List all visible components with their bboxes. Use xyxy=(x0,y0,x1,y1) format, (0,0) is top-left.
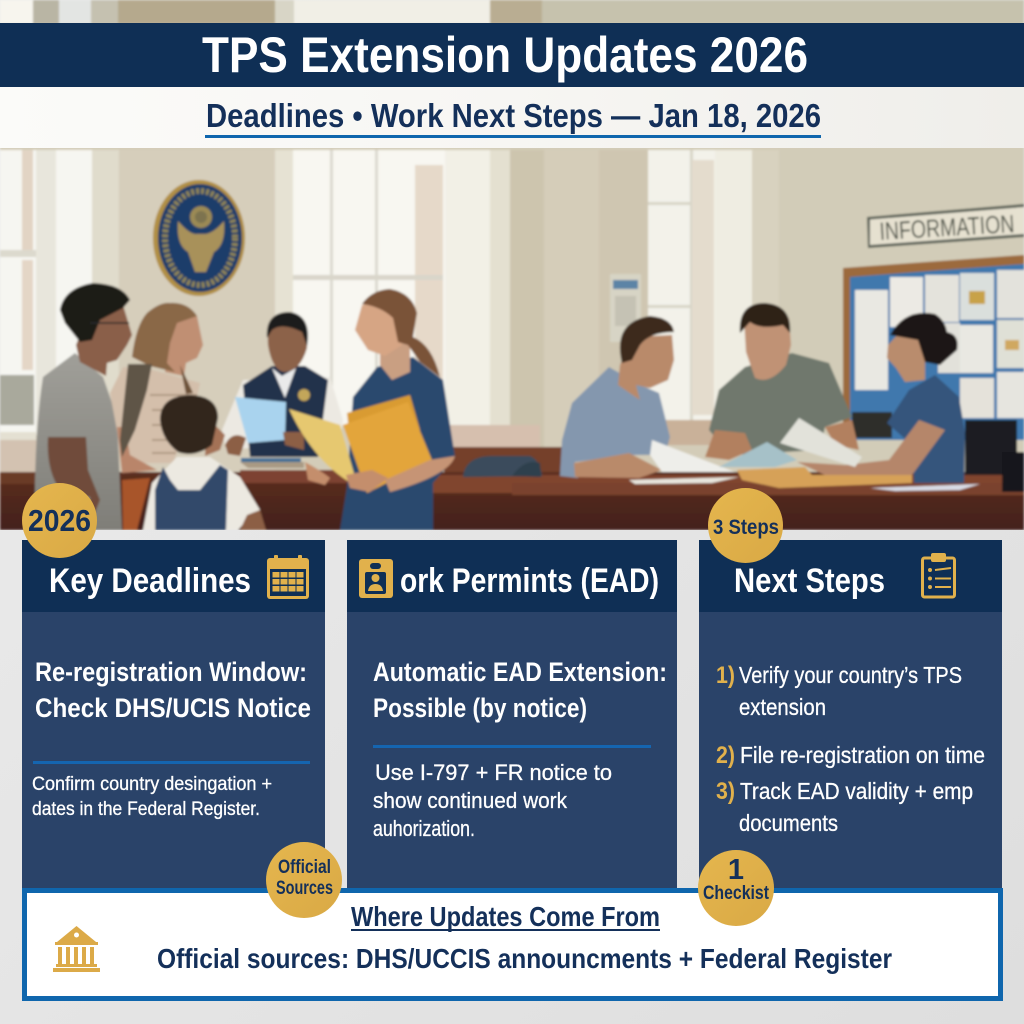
panel: key deadlines xyxy=(22,540,325,890)
seated woman in blue shirt xyxy=(797,313,965,483)
badge: 1 checklist: Checkist xyxy=(703,883,770,904)
bulletin board xyxy=(843,255,1024,440)
icon: calendar xyxy=(267,555,309,599)
icon: government building xyxy=(53,926,100,972)
icon: id badge xyxy=(359,559,393,598)
body text: i-797 notice: auhorization. xyxy=(373,816,475,841)
counter desk xyxy=(0,456,1024,530)
body text: i-797 notice: show continued work xyxy=(373,788,568,813)
body text: confirm designation: Confirm country desingation + xyxy=(32,774,272,795)
woman in striped top xyxy=(110,303,203,530)
papers and folders on counter xyxy=(629,418,980,491)
badge: 3 steps: 3 Steps xyxy=(713,516,779,539)
heading: next steps: Next Steps xyxy=(734,562,885,600)
numbered steps list: Verify your country’s TPS xyxy=(739,662,962,688)
numbered steps list xyxy=(716,662,985,836)
woman holding folder xyxy=(289,289,455,530)
body text: confirm designation xyxy=(32,774,272,820)
subheading: automatic ead extension: Automatic EAD Extension: xyxy=(373,657,667,687)
panel: work permits xyxy=(347,540,677,890)
subheading: re-registration window xyxy=(35,657,311,723)
seated man in green polo xyxy=(705,303,859,460)
badge: 1 checklist: 1 xyxy=(728,854,744,886)
body text: i-797 notice xyxy=(373,760,612,841)
badge: 1 checklist xyxy=(698,850,774,926)
small wall poster xyxy=(610,274,641,342)
badge: 2026 xyxy=(22,483,97,558)
subheading: automatic ead extension xyxy=(373,657,667,723)
subheading: re-registration window: Re-registration Window: xyxy=(35,657,307,687)
office photo scene xyxy=(0,0,1024,530)
badge: 3 steps xyxy=(708,488,783,563)
subtitle text: Deadlines • Work Next Steps — Jan 18, 2026 xyxy=(206,97,821,134)
panel: next steps xyxy=(699,540,1002,890)
numbered steps list: 3) xyxy=(716,778,735,805)
seated man in blue shirt xyxy=(560,316,674,478)
numbered steps list: Track EAD validity + emp xyxy=(740,778,973,804)
heading: key deadlines: Key Deadlines xyxy=(49,562,251,600)
heading: work permits: ork Permints (EAD) xyxy=(400,562,659,600)
clerk in navy vest xyxy=(222,312,343,468)
subheading: automatic ead extension: Possible (by notice) xyxy=(373,693,587,723)
numbered steps list: File re-registration on time xyxy=(740,742,985,768)
child with backpack xyxy=(143,395,266,530)
badge: official sources: Sources xyxy=(276,878,333,899)
numbered steps list: 1) xyxy=(716,662,735,689)
wall seal xyxy=(153,180,245,296)
subheading: re-registration window: Check DHS/UCIS Notice xyxy=(35,693,311,723)
numbered steps list: documents xyxy=(739,810,838,836)
badge: official sources xyxy=(266,842,342,918)
body text: i-797 notice: Use I-797 + FR notice to xyxy=(375,760,612,785)
office monitor xyxy=(965,420,1024,492)
panel: where updates come from xyxy=(24,890,1000,998)
man in grey polo xyxy=(35,283,132,530)
numbered steps list: 2) xyxy=(716,742,735,769)
back wall and windows xyxy=(0,0,1024,474)
body text: confirm designation: dates in the Federal Register. xyxy=(32,799,260,820)
badge: 2026: 2026 xyxy=(28,503,91,538)
title text: TPS Extension Updates 2026 xyxy=(202,27,808,83)
top title band xyxy=(0,23,1024,87)
numbered steps list: extension xyxy=(739,694,826,720)
icon: clipboard checklist xyxy=(922,553,954,597)
heading: where updates come from: Where Updates Come From xyxy=(351,901,660,932)
badge: official sources: Official xyxy=(278,857,331,878)
sources text: Official sources: DHS/UCCIS announcments + Federal Register xyxy=(157,943,892,974)
subtitle band xyxy=(0,87,1024,148)
